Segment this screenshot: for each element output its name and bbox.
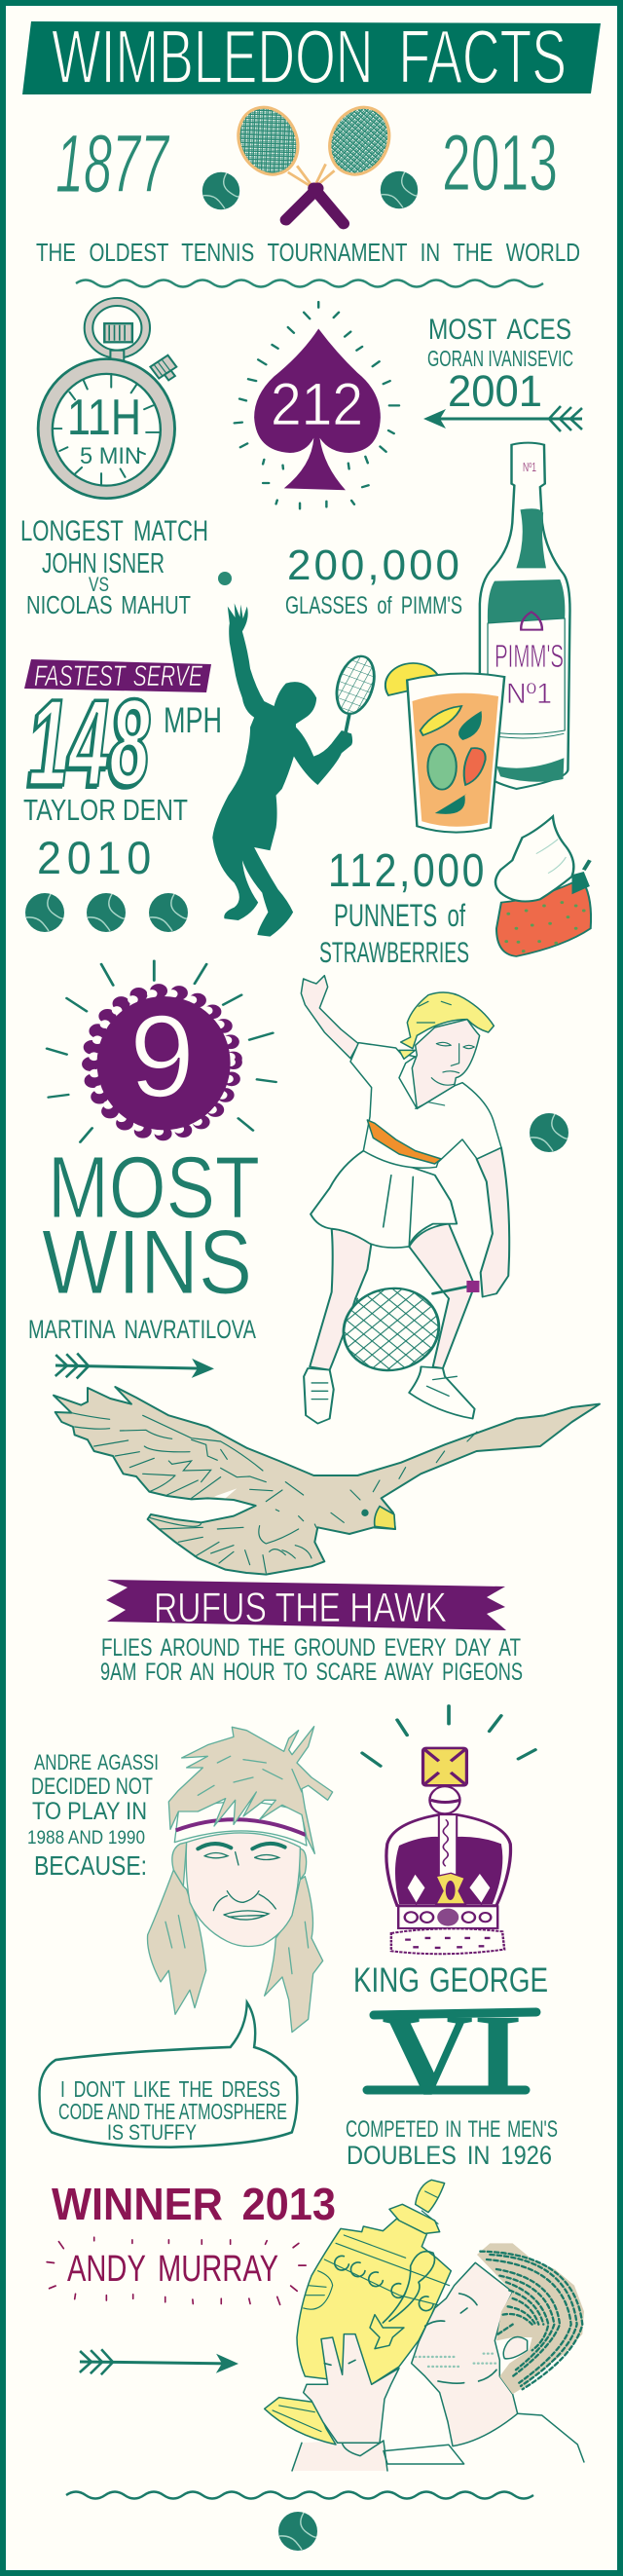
text: longest match: LONGEST MATCH <box>20 515 208 547</box>
icon: stopwatch <box>38 302 181 499</box>
name taylor dent: TAYLOR DENT <box>23 793 188 827</box>
year 2013: 2013 <box>442 119 558 207</box>
text: andy murray with rays <box>47 2237 306 2304</box>
text: andre agassi: ANDRE AGASSI <box>34 1750 159 1774</box>
text: punnets of strawberries: 112,000 <box>328 845 487 897</box>
speech bubble <box>40 2002 297 2147</box>
illustration: strawberry and cream <box>495 816 591 956</box>
text: punnets of strawberries <box>319 845 487 969</box>
arrow: murray <box>80 2349 238 2376</box>
text: andre agassi: TO PLAY IN <box>32 1798 147 1825</box>
bottle label text <box>495 460 564 710</box>
closing wave divider <box>66 2491 533 2499</box>
text: most aces: 2001 <box>448 366 542 416</box>
text: most aces <box>427 314 573 416</box>
text: most wins: WINS <box>42 1211 252 1313</box>
text: longest match: NICOLAS MAHUT <box>26 590 191 619</box>
text: glasses of pimm's <box>285 541 462 619</box>
three tennis balls <box>25 893 188 932</box>
text: competed in men's doubles: DOUBLES IN 1926 <box>347 2141 552 2170</box>
lower body and racket <box>304 1147 509 1424</box>
text: andre agassi <box>27 1750 159 1881</box>
bottle label text: Nº1 <box>523 460 536 474</box>
speech bubble: IS STUFFY <box>107 2120 197 2145</box>
text: andre agassi: 1988 AND 1990 <box>27 1828 145 1848</box>
speed value 148: 148 <box>28 674 150 811</box>
rufus ribbon: RUFUS THE HAWK <box>154 1585 447 1631</box>
arrow: aces <box>423 406 582 431</box>
panel: fastest serve <box>23 659 222 932</box>
badge value 9: 9 <box>129 991 195 1122</box>
speech bubble: CODE AND THE ATMOSPHERE <box>58 2099 287 2124</box>
icon: tennis ball left <box>202 172 239 209</box>
fastest serve tag <box>24 659 211 692</box>
bottle label text: Nº1 <box>506 678 552 710</box>
icon: scalloped badge with rays <box>47 961 276 1142</box>
icon: crossed rackets <box>229 99 399 224</box>
text: most wins <box>28 1139 260 1344</box>
text: winner 2013: WINNER 2013 <box>52 2179 336 2229</box>
text: most aces: MOST ACES <box>428 314 571 346</box>
text: most wins: MARTINA NAVRATILOVA <box>28 1315 256 1344</box>
text: longest match: JOHN ISNER <box>42 548 165 579</box>
text: flies around the ground <box>100 1634 523 1686</box>
year 1877: 1877 <box>55 118 170 209</box>
illustration: andre agassi <box>147 1727 333 2033</box>
upper body and head <box>301 976 501 1168</box>
text: longest match: VS <box>89 574 109 596</box>
year 2010: 2010 <box>37 832 157 883</box>
icon: tennis ball right <box>381 171 418 208</box>
text: andy murray with rays: ANDY MURRAY <box>67 2249 278 2290</box>
text: andre agassi: DECIDED NOT <box>31 1773 153 1800</box>
roman numeral VI: VI <box>382 1991 523 2118</box>
text: glasses of pimm's: GLASSES of PIMM'S <box>285 592 462 619</box>
bottle label text: PIMM'S <box>495 638 564 674</box>
icon: tennis ball <box>530 1113 568 1152</box>
illustration: rufus the hawk <box>54 1387 600 1575</box>
speech bubble: I DON'T LIKE THE DRESS <box>60 2076 280 2102</box>
stopwatch: 11H: 11H <box>67 390 141 446</box>
fastest serve tag: FASTEST SERVE <box>34 660 203 692</box>
text: glasses of pimm's: 200,000 <box>287 541 462 589</box>
text: punnets of strawberries: PUNNETS of <box>334 898 465 933</box>
stopwatch: 5 MIN: 5 MIN <box>80 443 141 469</box>
text: andre agassi: BECAUSE: <box>34 1850 147 1881</box>
illustration: martina navratilova <box>301 976 509 1424</box>
text: punnets of strawberries: STRAWBERRIES <box>319 937 469 969</box>
text: king george: KING GEORGE <box>353 1961 548 1999</box>
icon: spade with rays <box>235 302 399 508</box>
text: longest match <box>20 515 208 619</box>
icon: served ball <box>218 572 232 585</box>
text: most wins: MOST <box>48 1139 260 1237</box>
icon: closing tennis ball <box>278 2512 317 2551</box>
illustration: pimm's glass <box>385 663 504 833</box>
illustration: andy murray kissing trophy <box>265 2180 584 2471</box>
illustration: pimm's bottle <box>480 443 569 789</box>
text: competed in men's doubles <box>346 2116 558 2170</box>
arrow: martina <box>55 1353 214 1381</box>
unit mph: MPH <box>164 700 222 740</box>
illustration: serving player silhouette <box>212 603 380 937</box>
icon: royal crown <box>362 1706 535 1954</box>
spade value 212: 212 <box>271 371 363 437</box>
